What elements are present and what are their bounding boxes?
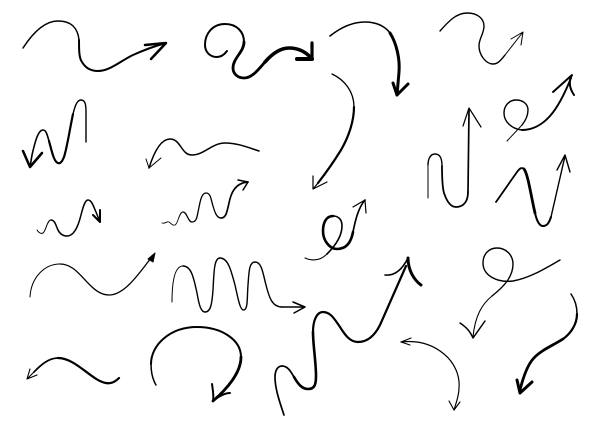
- arrow: wave top left: [23, 21, 166, 71]
- arrow: small loop up: [305, 200, 366, 260]
- arrow: V shape up: [496, 155, 570, 226]
- arrow: sine wave with filled head: [30, 253, 155, 297]
- arrow: long curve down-left: [313, 74, 354, 189]
- arrow: spiral bold: [205, 24, 312, 78]
- arrow: small squiggle: [37, 200, 100, 236]
- arrow: gentle wave left: [146, 139, 259, 168]
- arrow: loop upward right: [504, 75, 574, 141]
- arrow: peak down left: [23, 100, 86, 167]
- arrow: thin wave top right: [440, 13, 523, 64]
- arrow: big zigzag up: [275, 258, 421, 415]
- arrow: thick sweep bottom right: [517, 294, 577, 393]
- arrow: bottom left wave: [27, 358, 119, 383]
- arrow: big curve down: [330, 22, 408, 95]
- arrow: tall waves right: [172, 258, 305, 313]
- arrow: growing squiggle: [162, 180, 248, 225]
- arrow: arc from left down: [401, 338, 460, 410]
- arrow: big loop down: [460, 248, 560, 338]
- arrow: big arc round: [151, 327, 241, 401]
- arrow: U shape up: [428, 108, 481, 207]
